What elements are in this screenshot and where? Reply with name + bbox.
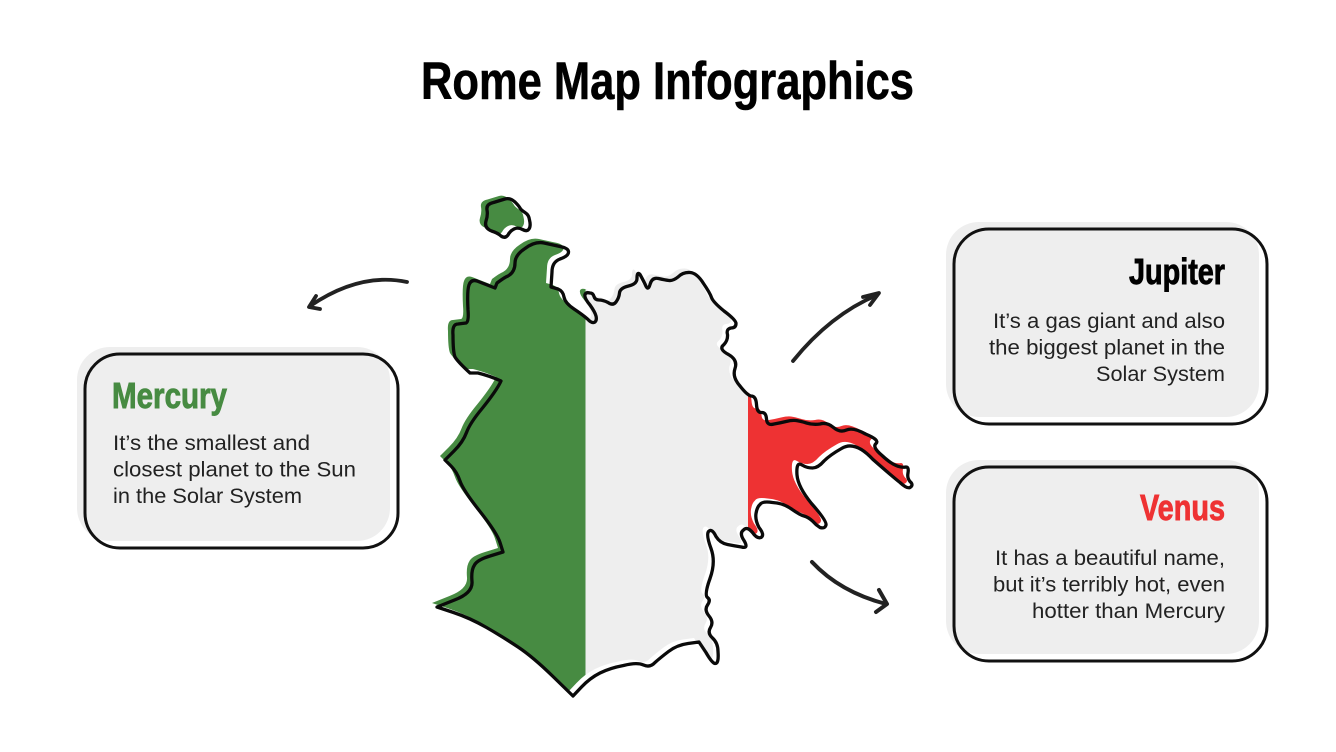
text: Mercury description: in the Solar System <box>113 484 302 508</box>
text: Jupiter description: Solar System <box>1096 362 1225 386</box>
arrow: to Mercury <box>309 280 407 309</box>
text: Venus description: but it’s terribly hot, even <box>993 572 1225 596</box>
title: Rome Map Infographics <box>421 52 914 111</box>
text: Mercury description <box>113 431 356 508</box>
map fill: white section <box>586 268 748 674</box>
map fill: red section <box>748 392 907 534</box>
text: Jupiter description <box>989 309 1225 386</box>
text: Venus description: It has a beautiful name, <box>995 546 1225 570</box>
arrow: to Jupiter <box>793 293 879 361</box>
map fill: green section <box>432 196 586 690</box>
text: Venus description: hotter than Mercury <box>1032 599 1225 623</box>
arrow: to Venus <box>812 562 887 612</box>
text: Venus description <box>993 546 1225 623</box>
map: Rome in Italian flag colours <box>432 196 912 696</box>
panel: Jupiter <box>946 222 1267 424</box>
heading: Venus: Venus <box>1140 487 1225 528</box>
panel: Mercury <box>77 347 398 548</box>
text: Jupiter description: It’s a gas giant and also <box>993 309 1225 333</box>
heading: Mercury: Mercury <box>112 375 227 416</box>
text: Jupiter description: the biggest planet in the <box>989 336 1225 360</box>
panel: Venus <box>946 460 1267 661</box>
heading: Jupiter: Jupiter <box>1129 251 1225 292</box>
map outline <box>437 199 912 696</box>
text: Mercury description: It’s the smallest and <box>113 431 310 455</box>
text: Mercury description: closest planet to the Sun <box>113 458 356 482</box>
